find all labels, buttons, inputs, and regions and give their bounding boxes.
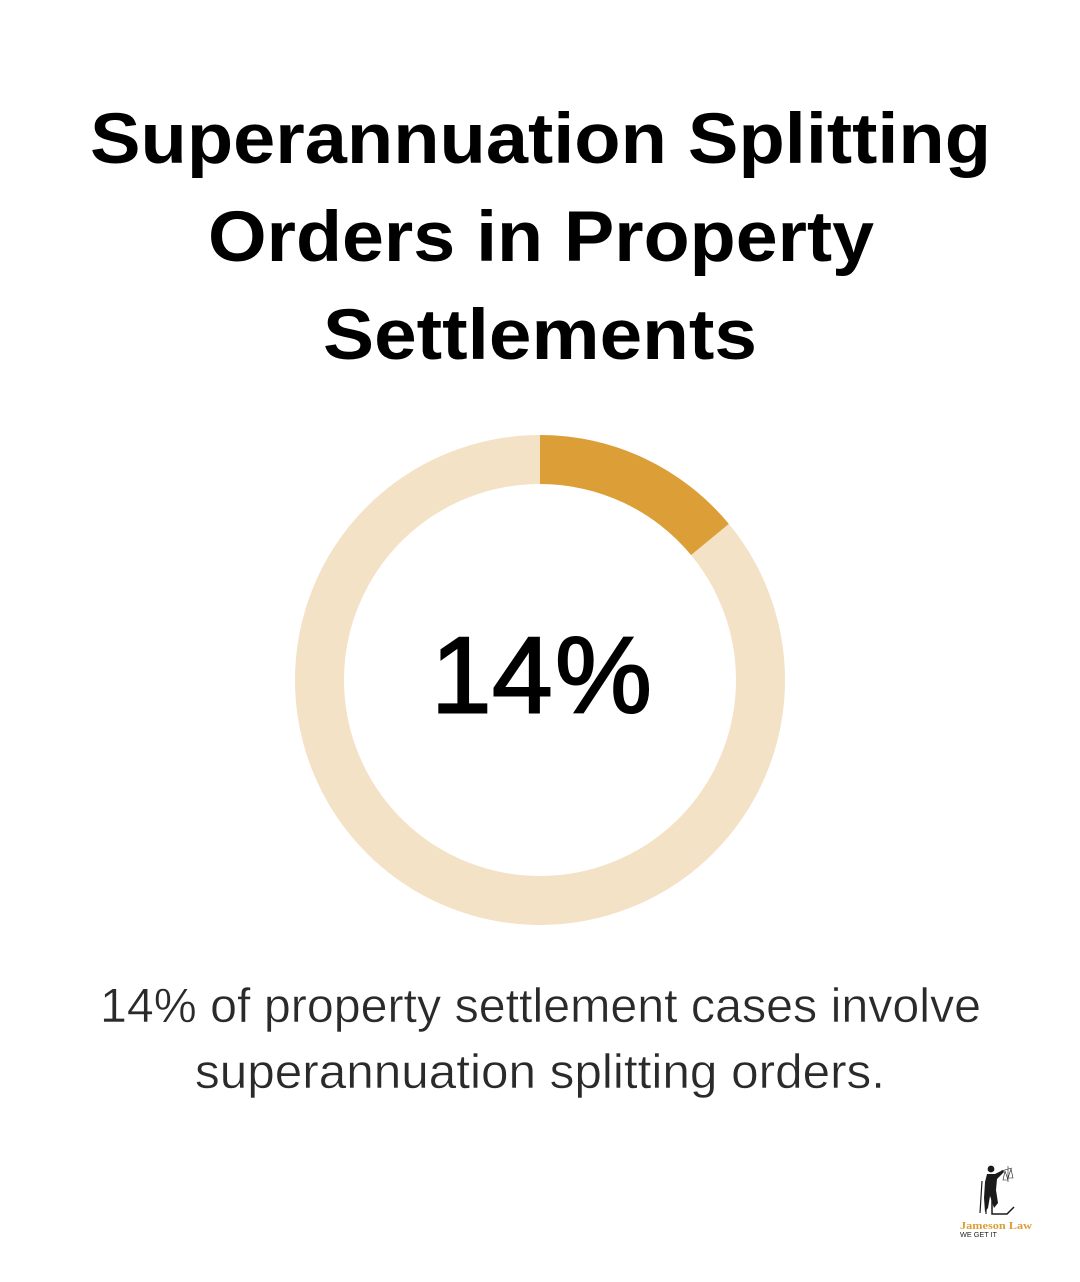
description [100,980,981,1099]
description: 14% of property settlement cases involve [100,980,981,1033]
title: Settlements [323,296,757,375]
center value: 14% [431,614,652,736]
icon: lady justice [980,1166,1014,1214]
title: Superannuation Splitting [90,100,991,179]
title [90,100,991,375]
donut segment: 14% [540,435,729,555]
donut track [320,460,760,900]
logo: Jameson Law [960,1166,1032,1239]
donut chart [320,435,760,900]
logo tagline: WE GET IT [960,1232,998,1239]
description: superannuation splitting orders. [195,1046,885,1099]
logo name: Jameson Law [960,1221,1032,1232]
title: Orders in Property [208,198,875,277]
